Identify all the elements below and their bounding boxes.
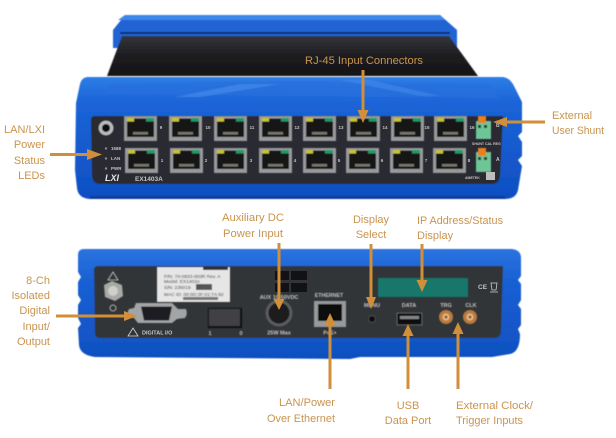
ethernet port: ETHERNET [315,293,344,299]
label: 8-Ch Isolated Digital Input/Output: Output [17,336,50,348]
label: LAN/Power Over Ethernet: LAN/Power [279,397,335,409]
shunt panel text: A [496,157,500,163]
menu button: MENU [364,303,380,309]
label: LAN/LXI Power Status LEDs [4,124,45,182]
auxiliary power connector: 25W Max [267,330,292,336]
label: External Clock/Trigger Inputs: Trigger Inputs [456,415,523,427]
label: 8-Ch Isolated Digital Input/Output: 8-Ch [26,275,50,287]
LCD display [378,278,468,297]
arrow: clock trigger [452,322,464,389]
port numbers: 15 [424,125,430,130]
label: LAN/LXI Power Status LEDs: Power [14,139,45,151]
label: USB Data Port: USB [397,400,419,412]
bottom row RJ-45 ports [125,148,466,173]
rocker switch: 0 [239,331,243,337]
status LED labels: PWR [111,166,122,171]
ethernet port: PoE+ [323,330,337,336]
port numbers: 7 [425,158,428,163]
serial number label: P/N: 70-0933-000R Rev. A [164,274,221,280]
label: Display Select: Display [353,214,390,226]
DB-9 digital I/O connector [128,303,187,323]
front unit: top view [107,15,478,76]
arrow: USB [402,324,414,389]
port numbers: 13 [338,125,344,130]
label: IP Address/Status Display: Display [417,230,454,242]
shunt panel text: SHUNT CAL REG [472,142,501,146]
label: LAN/LXI Power Status LEDs: Status [14,155,45,167]
TRG BNC input: TRG [440,303,452,309]
label: LAN/LXI Power Status LEDs: LEDs [18,170,45,182]
front unit: blue body [75,77,522,199]
label: 8-Ch Isolated Digital Input/Output: Isolated [11,290,50,302]
serial number label: Model: EX1403A [164,279,201,285]
arrow: RJ-45 connectors [358,70,368,123]
port numbers: 4 [294,158,297,163]
rear bumper [113,15,457,48]
status LED labels: 1588 [111,146,122,151]
status LED labels: LAN [111,156,120,161]
label: External User Shunt [552,110,604,137]
shunt panel text [465,123,501,180]
serial number label: S/N: 235019 [164,285,191,291]
label: Auxiliary DC Power Input [222,212,284,240]
digital I/O label [128,328,173,336]
top row RJ-45 ports [124,116,467,141]
port numbers [160,125,475,163]
menu button [364,303,380,322]
port numbers: 10 [205,125,211,130]
label: LAN/LXI Power Status LEDs: LAN/LXI [4,124,45,136]
arrow: IP display [416,244,428,292]
auxiliary power connector: AUX 10-50VDC [260,295,298,301]
serial number label [157,267,230,302]
label: Display Select [353,214,390,241]
label: LAN/Power Over Ethernet: Over Ethernet [267,413,335,425]
audio jack [98,120,114,136]
external shunt connectors [476,116,491,172]
port numbers: 1 [161,158,164,163]
label: External User Shunt: External [552,110,592,122]
label: Display Select: Select [356,229,386,241]
port numbers: 12 [294,125,300,130]
model name: EX1403A [135,176,163,183]
USB data port: DATA [402,303,416,309]
shunt panel text: B [496,123,500,129]
port numbers: 5 [338,158,341,163]
label: External Clock/Trigger Inputs [456,400,534,427]
serial number label: MAC ID: 00:0D:3F:01:7A:92 [164,292,224,298]
auxiliary power connector [260,295,298,336]
CLK BNC input: CLK [465,303,477,309]
port numbers: 14 [382,125,388,130]
label: External User Shunt: User Shunt [552,125,604,137]
port numbers: 11 [250,125,255,130]
black top cover [107,36,478,76]
status LED labels [105,146,122,171]
digital I/O label: DIGITAL I/O [142,330,173,336]
port numbers: 2 [205,158,208,163]
arrow: auxiliary DC [274,243,284,310]
ground screw and warning icons [104,272,123,311]
label: 8-Ch Isolated Digital Input/Output [11,275,51,348]
front dark panel [91,116,503,184]
label: IP Address/Status Display: IP Address/Status [417,215,503,227]
rocker switch [208,308,243,337]
arrow: display select [366,244,376,309]
CE and WEEE marks: CE [478,284,488,291]
label: Auxiliary DC Power Input: Auxiliary DC [222,212,284,224]
port numbers: 9 [160,125,163,130]
CE and WEEE marks [478,283,498,292]
label: 8-Ch Isolated Digital Input/Output: Digital [19,305,50,317]
port numbers: 6 [381,158,384,163]
LXI logo: LXI [105,173,120,183]
port numbers: 8 [468,158,471,163]
label: Auxiliary DC Power Input: Power Input [223,228,283,240]
CLK BNC input [463,303,477,324]
shunt panel text: AMETEK [465,176,480,180]
arrow: LED status [50,149,102,160]
arrow: external shunt [493,117,545,127]
rear unit: blue body [78,249,521,359]
label: LAN/Power Over Ethernet [267,397,335,425]
vent grid [275,271,307,292]
USB data port [397,303,422,325]
rocker switch: 1 [208,331,212,337]
rear dark panel [94,266,503,338]
label: USB Data Port: Data Port [385,415,431,427]
arrow: digital I/O [56,311,137,321]
port numbers: 3 [250,158,253,163]
label: IP Address/Status Display [417,215,503,242]
port numbers: 16 [469,125,475,130]
label: USB Data Port [385,400,431,427]
label: RJ-45 Input Connectors: RJ-45 Input Connectors [305,55,424,67]
label: External Clock/Trigger Inputs: External Clock/ [456,400,534,412]
TRG BNC input [439,303,453,324]
ethernet port [314,293,346,336]
label: 8-Ch Isolated Digital Input/Output: Input/ [22,321,51,333]
arrow: LAN power [324,313,336,389]
